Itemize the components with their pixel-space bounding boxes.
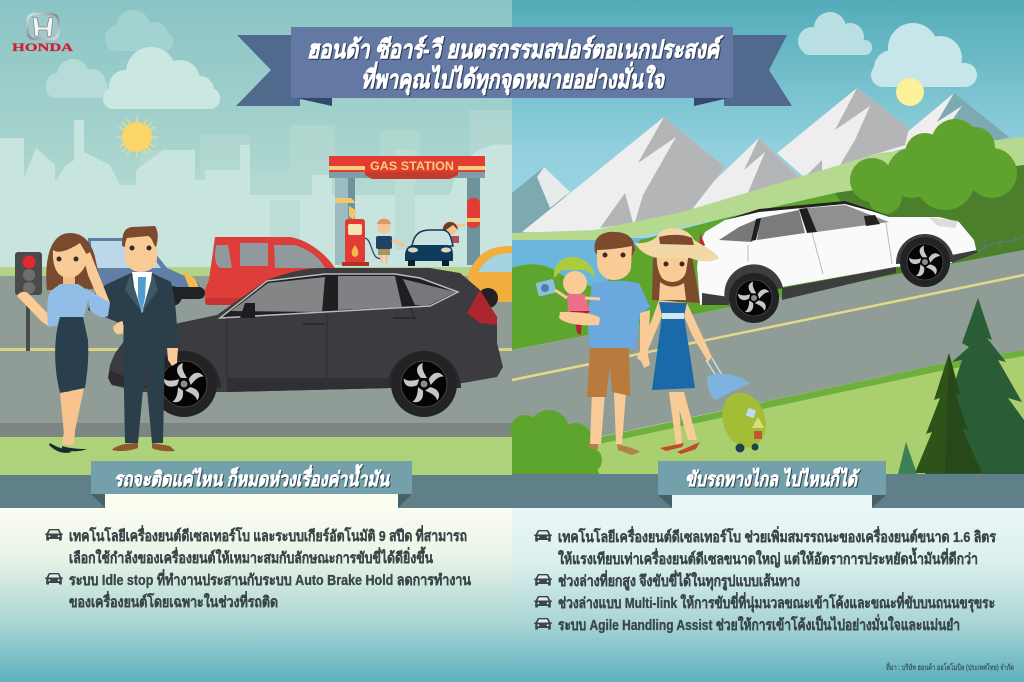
white car windows bbox=[719, 205, 889, 242]
panel: right text background bbox=[512, 508, 1024, 682]
sun right bbox=[896, 78, 924, 106]
family bbox=[536, 228, 773, 455]
windows bbox=[220, 274, 458, 318]
right bullet list bbox=[534, 526, 997, 634]
hill band bbox=[512, 137, 1024, 240]
bush bottom left bbox=[510, 410, 602, 475]
lake bbox=[512, 238, 660, 300]
city skyline bbox=[0, 110, 512, 280]
road bbox=[0, 276, 512, 423]
left sky bbox=[0, 0, 512, 280]
yellow car bbox=[468, 246, 512, 308]
panel: left city scene bbox=[0, 0, 512, 475]
wheels bbox=[151, 351, 217, 417]
left caption text: รถจะติดแค่ไหน ก็หมดห่วงเรื่องค่าน้ำมัน bbox=[114, 464, 390, 491]
right bullet 1 bbox=[534, 526, 997, 568]
lawn bbox=[0, 437, 512, 475]
background traffic cars bbox=[85, 237, 512, 308]
left bullet list bbox=[45, 525, 472, 611]
right caption text: ขับรถทางไกล ไปไหนก็ได้ bbox=[685, 467, 861, 491]
road lane line bbox=[0, 348, 512, 351]
suitcase bbox=[706, 358, 773, 453]
gas station sign text: GAS STATION bbox=[370, 159, 454, 173]
left bullet 1: เทคโนโลยีเครื่องยนต์ดีเซลเทอร์โบ และระบบเกียร์อัตโนมัติ 9 สปีด ที่สามารถ bbox=[69, 525, 467, 545]
blue car bbox=[85, 238, 205, 306]
white CR-V bbox=[697, 201, 977, 323]
left caption band bbox=[0, 475, 512, 508]
road bbox=[512, 250, 1024, 455]
grass strip bbox=[0, 267, 512, 277]
fuel pump bbox=[342, 219, 382, 266]
gas station bbox=[329, 156, 485, 266]
large bush bbox=[850, 119, 1017, 214]
green field bbox=[512, 165, 1024, 350]
left bullet 2: ของเครื่องยนต์โดยเฉพาะในช่วงที่รถติด bbox=[69, 591, 278, 611]
railing bbox=[979, 236, 1024, 252]
father bbox=[587, 232, 650, 455]
left caption ribbon bbox=[91, 461, 412, 508]
tail light bbox=[467, 290, 497, 325]
mountains bbox=[512, 88, 1009, 233]
sun left bbox=[116, 116, 158, 158]
left bullet 2: ระบบ Idle stop ที่ทำงานประสานกับระบบ Auto Brake Hold ลดการทำงาน bbox=[69, 569, 472, 589]
right sky bbox=[512, 0, 1024, 300]
left bullet 1 bbox=[45, 525, 467, 567]
panel: left text background bbox=[0, 508, 512, 682]
right bullet 2: ช่วงล่างที่ยกสูง จึงขับขี่ได้ในทุกรูปแบบเส้นทาง bbox=[558, 570, 800, 591]
black CR-V bbox=[108, 268, 503, 417]
right caption ribbon bbox=[658, 461, 886, 508]
child with camera bbox=[536, 257, 600, 335]
pine trees bbox=[898, 298, 1024, 474]
small car with driver bbox=[405, 221, 465, 266]
clouds left bbox=[46, 10, 220, 109]
road kerb bbox=[0, 423, 512, 437]
left bullet 1: เลือกใช้กำลังของเครื่องยนต์ให้เหมาะสมกับลักษณะการขับขี่ได้ดียิ่งขึ้น bbox=[69, 546, 434, 567]
clouds right bbox=[798, 12, 977, 87]
panel: right mountain scene bbox=[510, 0, 1024, 475]
man in suit bbox=[88, 226, 178, 451]
woman in office wear bbox=[17, 233, 110, 453]
attendant bbox=[376, 219, 405, 263]
traffic light bbox=[15, 252, 42, 351]
title banner bbox=[236, 27, 792, 106]
left bullet 2 bbox=[45, 569, 472, 611]
title line 2: ที่พาคุณไปได้ทุกจุดหมายอย่างมั่นใจ bbox=[361, 61, 665, 95]
Honda logo bbox=[12, 14, 73, 54]
road lane line bbox=[512, 275, 1024, 380]
lower meadow bbox=[512, 350, 1024, 475]
mother bbox=[635, 228, 719, 454]
red van bbox=[205, 237, 336, 305]
right bullet 2 bbox=[534, 570, 800, 591]
Honda wordmark: HONDA bbox=[12, 40, 73, 54]
right caption band bbox=[512, 474, 1024, 508]
title line 1: ฮอนด้า ซีอาร์-วี ยนตรกรรมสปอร์ตอเนกประสงค์ bbox=[307, 35, 724, 64]
